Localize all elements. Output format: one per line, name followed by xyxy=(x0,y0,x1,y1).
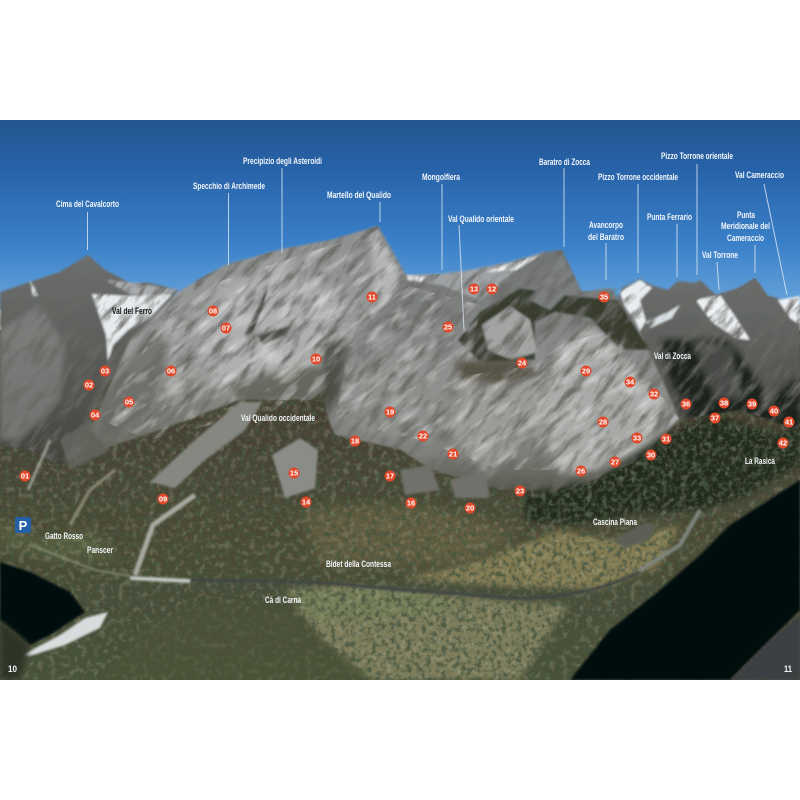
peak and place labels: Baratro di Zocca xyxy=(539,157,590,168)
peak and place labels: Val Qualido occidentale xyxy=(241,413,315,424)
far left mountain xyxy=(0,254,178,456)
peak and place labels: Mongolfiera xyxy=(422,172,460,183)
page numbers: 11 xyxy=(784,664,793,675)
peak and place labels: Cima del Cavalcorto xyxy=(56,199,119,210)
rock texture xyxy=(0,226,800,490)
numbered route markers: 35 xyxy=(600,293,608,302)
numbered route markers: 11 xyxy=(368,293,376,302)
numbered route markers: 12 xyxy=(488,285,496,294)
numbered route markers: 28 xyxy=(599,418,607,427)
leader lines xyxy=(88,164,787,330)
numbered route markers: 18 xyxy=(351,437,359,446)
numbered route markers: 26 xyxy=(577,467,585,476)
peak and place labels: Pizzo Torrone orientale xyxy=(661,151,733,162)
peak and place labels: Cameraccio xyxy=(727,233,764,244)
numbered route markers: 30 xyxy=(647,451,655,460)
numbered route markers: 29 xyxy=(582,367,590,376)
Baratro massif xyxy=(322,250,680,490)
numbered route markers: 20 xyxy=(466,504,474,513)
numbered route markers: 33 xyxy=(633,434,641,443)
peak and place labels: Meridionale del xyxy=(721,221,770,232)
peak and place labels: Avancorpo xyxy=(589,220,623,231)
numbered route markers: 17 xyxy=(386,472,394,481)
rock highlights xyxy=(100,230,680,470)
dark conifer forest and meadow hues xyxy=(0,415,800,680)
icon: parking sign xyxy=(15,517,31,533)
numbered route markers: 22 xyxy=(419,432,427,441)
numbered route markers: 14 xyxy=(302,498,311,507)
icon: parking sign: P xyxy=(19,518,28,533)
numbered route markers: 39 xyxy=(748,400,756,409)
numbered route markers: 01 xyxy=(21,472,29,481)
dark shadow bottom left xyxy=(0,562,85,645)
page numbers: 10 xyxy=(8,664,17,675)
numbered route markers: 38 xyxy=(720,399,728,408)
sky xyxy=(0,120,800,310)
peak and place labels: Gatto Rosso xyxy=(45,531,83,542)
far right mountains xyxy=(618,277,800,430)
Qualido massif xyxy=(90,226,410,450)
numbered route markers: 34 xyxy=(626,378,635,387)
numbered route markers: 13 xyxy=(470,285,478,294)
peak and place labels: Pizzo Torrone occidentale xyxy=(598,172,678,183)
stream xyxy=(28,440,700,598)
peak and place labels: La Rasica xyxy=(745,456,775,467)
numbered route markers: 07 xyxy=(222,324,230,333)
numbered route markers: 06 xyxy=(167,367,175,376)
numbered route markers: 36 xyxy=(682,400,690,409)
peak and place labels: Cascina Piana xyxy=(593,517,637,528)
page numbers xyxy=(8,664,793,675)
foreground larch trees xyxy=(100,600,370,680)
peak and place labels: Cà di Carna xyxy=(265,595,301,606)
numbered route markers: 25 xyxy=(444,323,452,332)
numbered route markers: 05 xyxy=(125,398,133,407)
numbered route markers: 04 xyxy=(91,411,100,420)
numbered route markers: 03 xyxy=(101,367,109,376)
meadow and bare tree texture xyxy=(0,400,800,680)
peak and place labels: Martello del Qualido xyxy=(327,190,391,201)
peak and place labels: del Baratro xyxy=(588,232,624,243)
numbered route markers xyxy=(20,284,794,514)
dark shadow bottom right xyxy=(570,480,800,680)
peak and place labels: Punta xyxy=(737,210,755,221)
peak and place labels xyxy=(45,151,784,606)
numbered route markers: 41 xyxy=(785,418,793,427)
panoramic photo infographic xyxy=(0,120,800,680)
peak and place labels: Bidet della Contessa xyxy=(326,559,391,570)
numbered route markers: 02 xyxy=(85,381,93,390)
numbered route markers: 37 xyxy=(711,414,719,423)
numbered route markers: 15 xyxy=(290,469,298,478)
peak and place labels: Panscer xyxy=(87,545,113,556)
numbered route markers: 40 xyxy=(770,407,778,416)
peak and place labels: Punta Ferrario xyxy=(647,212,692,223)
numbered route markers: 31 xyxy=(662,435,670,444)
snow avalanche remnant xyxy=(22,612,108,656)
numbered route markers: 16 xyxy=(407,499,415,508)
peak and place labels: Specchio di Archimede xyxy=(193,181,265,192)
peak and place labels: Precipizio degli Asteroidi xyxy=(243,156,322,167)
small cliffs in the forest xyxy=(60,402,490,498)
peak and place labels: Val Torrone xyxy=(702,250,738,261)
numbered route markers: 27 xyxy=(611,458,619,467)
snow ridge behind Qualido xyxy=(405,251,546,301)
forest slopes xyxy=(0,400,800,680)
hamlet of Cascina Piana xyxy=(612,522,655,548)
numbered route markers: 08 xyxy=(209,307,217,316)
forest texture xyxy=(0,400,800,680)
underlying ground xyxy=(0,330,800,680)
peak and place labels: Val Qualido orientale xyxy=(448,214,514,225)
numbered route markers: 19 xyxy=(386,408,394,417)
numbered route markers: 32 xyxy=(650,390,658,399)
numbered route markers: 23 xyxy=(516,487,524,496)
numbered route markers: 10 xyxy=(312,355,320,364)
numbered route markers: 09 xyxy=(159,495,167,504)
peak and place labels: Val del Ferro xyxy=(112,306,152,317)
peak and place labels: Val di Zocca xyxy=(654,351,691,362)
numbered route markers: 21 xyxy=(449,450,457,459)
numbered route markers: 24 xyxy=(518,359,527,368)
numbered route markers: 42 xyxy=(779,439,787,448)
